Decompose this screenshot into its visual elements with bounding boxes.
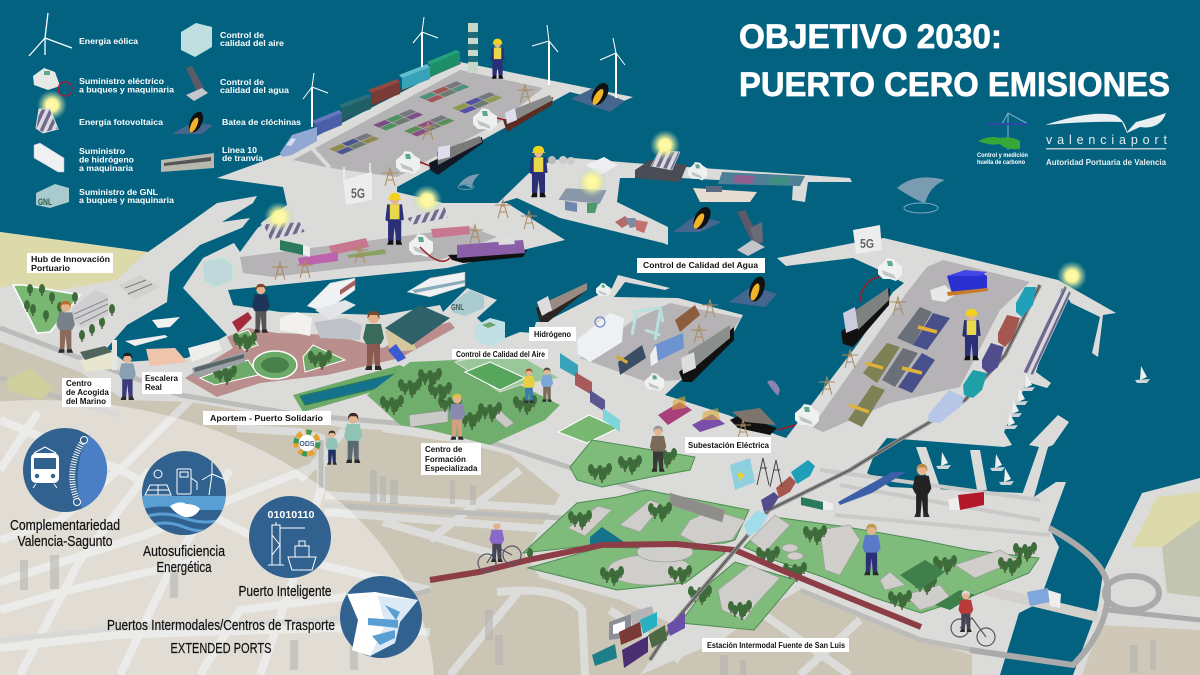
legend text: Energía eólica [79,36,138,46]
yard containers north pier [312,81,502,168]
label: estación: Estación Intermodal Fuente de San Luis [707,641,845,650]
road trucks [801,492,1061,608]
microscope on water [737,210,765,256]
legend text: Energía fotovoltaica [79,117,163,127]
legend icon: air quality [181,23,212,57]
mainland mid train [744,460,815,536]
text: complementariedad: Complementariedad [10,518,120,534]
carbon footprint logo: Control y medición [977,153,1028,159]
cyclists [478,521,995,646]
legend text: Suministro [79,146,125,156]
substation [730,458,782,490]
text: complementariedad: Valencia-Sagunto [18,534,112,550]
text: autosuficiencia [143,544,226,576]
label: hidrógeno [529,327,576,341]
label: hub: Hub de Innovación [31,255,110,264]
5G towers: 5G [860,236,874,251]
main road strokes [0,328,1073,665]
legend text [79,30,301,205]
legend text: a buques y maquinaria [79,195,174,205]
5G towers: 5G [351,185,365,201]
park trees [380,368,1037,620]
mainland train [560,353,578,378]
plaza and central gardens [185,322,618,445]
port machinery [272,85,906,438]
label: escalera: Escalera [145,374,178,383]
legend icon: solar panel [36,109,58,133]
GNL [452,290,484,316]
legend icon: hydrogen [34,143,64,172]
title: PUERTO CERO EMISIONES [739,66,1170,104]
north pier train [280,50,460,157]
text: puerto inteligente: Puerto Inteligente [238,584,332,600]
T-shaped central pier [497,158,852,245]
label: hub: Portuario [31,264,70,273]
upper building [118,275,160,300]
railway line [650,285,1040,660]
legend [29,13,301,208]
ring road and bridge [970,528,1200,665]
lighthouse [468,23,478,73]
wind turbines [303,17,625,127]
text: complementariedad [10,518,120,550]
text: extended ports: EXTENDED PORTS [170,641,272,657]
charger [688,162,707,180]
valenciaport logo: valenciaport [1046,133,1168,147]
legend text: de tranvía [222,153,263,163]
marina fingers [916,415,1069,497]
right pier containers [848,307,950,427]
legend text: de hidrógeno [79,154,134,164]
title [739,18,1170,104]
text: extended ports: Puertos Intermodales/Centros de Trasporte [107,618,335,634]
container row [718,172,805,186]
legend text: Control de [220,30,264,40]
label: hub [27,253,113,273]
beach and coast right [0,232,1200,675]
legend text: Control de [220,77,264,87]
label: marino: de Acogida [66,388,109,397]
right pier train [928,287,1036,423]
central quay equipment [560,270,988,432]
circle: extended ports [340,576,422,658]
skyline silhouettes [20,470,1156,675]
blue truck [654,333,684,362]
carbon footprint logo [977,113,1028,166]
legend icon: microscope [186,66,208,101]
label: formación: Centro de [425,445,463,454]
light fade overlay on left city [0,400,434,675]
canal water [107,222,262,362]
label: aportem: Aportem - Puerto Solidario [210,414,323,423]
solar canopy [838,472,906,505]
label: estación [702,638,849,652]
truck green [280,240,303,255]
right bank land [1073,478,1200,675]
lamps [37,90,1087,291]
sea details: dolphins and boats [458,174,1150,485]
circle: complementariedad [23,428,115,512]
legend text: a buques y maquinaria [79,84,174,94]
legend icon: mussel raft [172,109,213,135]
legend icon: shore power [33,68,72,96]
circle: puerto inteligente [249,496,331,578]
white truck and blue container [930,285,955,302]
legend text: a maquinaria [79,163,133,173]
light road network [0,400,860,675]
text: autosuficiencia: Autosuficiencia [143,544,226,560]
legend text: Suministro de GNL [79,187,158,197]
label: escalera [142,372,182,394]
label: hidrógeno: Hidrógeno [534,330,571,339]
legend icon: GNL tank: GNL [38,197,52,207]
valenciaport logo: Autoridad Portuaria de Valencia [1046,158,1167,167]
bottom intermodal station [592,606,685,668]
text: extended ports [107,618,335,657]
park building [409,410,448,427]
white map labels [27,253,849,652]
label: formación [421,443,481,475]
carbon footprint logo: huella de carbono [977,160,1025,166]
people [56,39,981,575]
label: marino: Centro [66,379,92,388]
cargo yards [240,70,1030,432]
ships [429,95,890,435]
city blocks east [640,590,972,675]
container stacks [618,345,646,375]
terminal buildings: GNL [451,303,464,312]
football field [465,362,525,390]
label: subestación [685,437,771,453]
solar panels [263,150,1071,375]
label: agua: Control de Calidad del Agua [643,261,759,270]
text: autosuficiencia: Energética [156,560,212,576]
legend icon: wind turbine [29,13,72,56]
circle: autosuficiencia [142,451,226,535]
tram [192,352,245,378]
label: formación: Formación [425,455,466,464]
label: aire: Control de Calidad del Aire [456,350,545,359]
legend text: calidad del agua [220,85,289,95]
legend text: Suministro eléctrico [79,76,164,86]
cruise ships and yachts [125,272,465,366]
legend icon: tram [161,153,214,172]
marine reception [80,350,118,372]
mussel rafts [571,80,777,307]
bike path [430,544,921,627]
beige ship [693,188,757,202]
label: marino: del Marino [66,397,106,406]
terminal buildings [6,258,505,400]
legend text: Línea 10 [222,145,257,155]
valenciaport logo [1045,113,1168,167]
ODS badge: ODS [299,441,315,448]
label: agua [637,258,765,273]
tech parks [380,368,1039,630]
city blocks base [0,342,675,675]
hub innovation park [13,284,115,342]
escalera [188,340,222,362]
5G towers [343,163,882,254]
legend icon: GNL tank [36,184,69,208]
label: marino [62,378,111,407]
ODS badge [296,432,318,454]
legend text: calidad del aire [220,38,284,48]
customs building [6,368,55,400]
locomotive [280,127,317,157]
circle: puerto inteligente: 01010110 [268,510,315,521]
campus park [367,360,560,445]
label: escalera: Real [145,383,162,392]
label: aportem [203,411,331,425]
plaza trees [213,332,332,385]
label: subestación: Subestación Eléctrica [688,441,770,450]
label: formación: Especializada [425,464,478,473]
park buildings [568,493,1018,620]
title: OBJETIVO 2030: [739,18,1002,56]
pier 2 loads [280,226,470,266]
legend text: Batea de clóchinas [222,117,301,127]
T pier detail [548,156,805,233]
